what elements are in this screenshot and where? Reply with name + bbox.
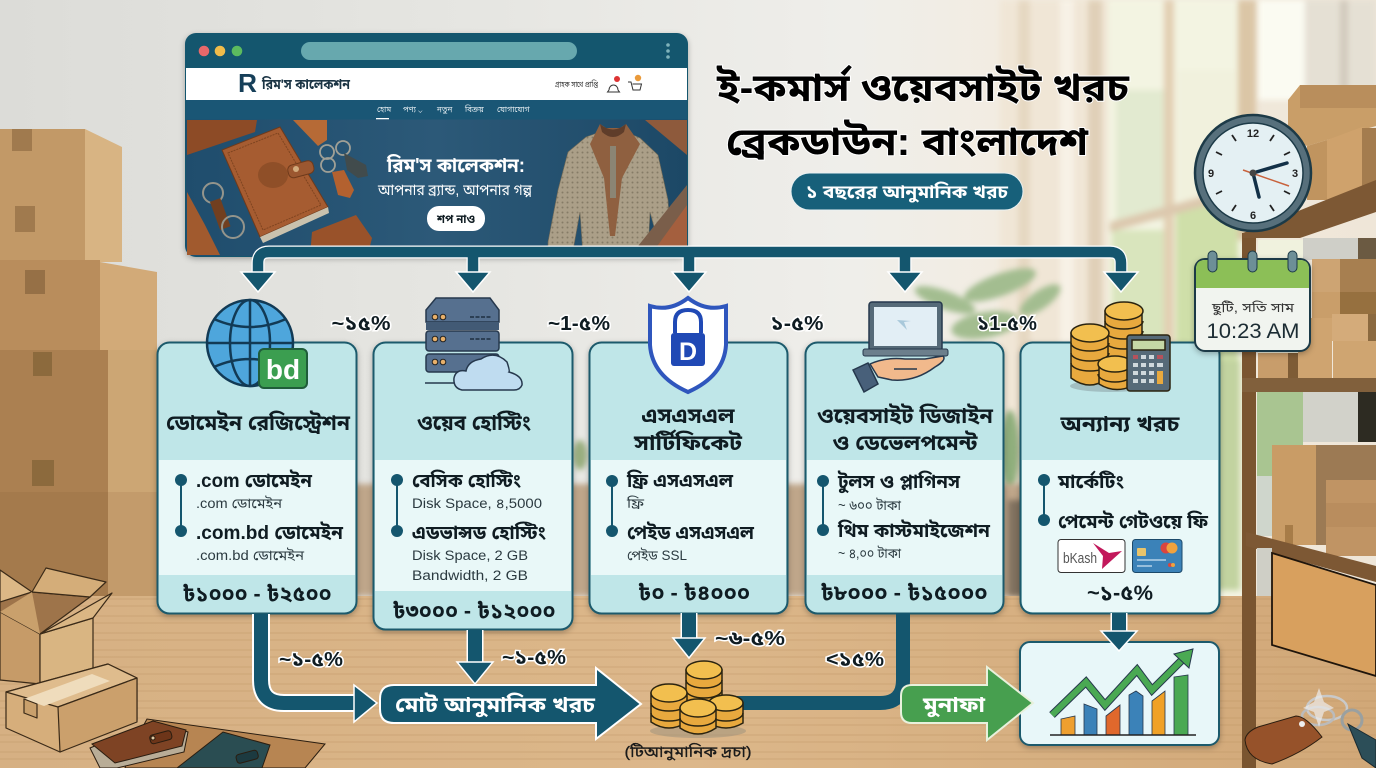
icon: coin stacks (650, 661, 746, 738)
icon: coins and calculator (1070, 302, 1170, 392)
boxes: left stack (0, 129, 157, 596)
icon: globe with bd badge: bd (266, 354, 300, 385)
panel: website design and development: ও ডেভেলপমেন্ট (832, 431, 978, 455)
panel: web hosting: Disk Space, ৪,5000 (412, 496, 542, 511)
boxes: front left (0, 568, 137, 752)
title (716, 64, 1130, 164)
blurred back table (150, 484, 1030, 596)
site nav (186, 100, 687, 120)
panel: web hosting: Disk Space, 2 GB (412, 548, 528, 563)
panel: website design and development: টুলস ও প্লাগিনস (837, 471, 961, 494)
percent labels: bottom flow: ~১-৫% (502, 647, 566, 669)
coin caption: (টিআনুমানিক দ্রচা) (624, 744, 752, 761)
timeline (175, 474, 187, 537)
window and curtains (1000, 0, 1376, 600)
table tray with wallets (90, 719, 325, 768)
icon: calendar with time: ছুটি, সতি সাম (1211, 300, 1295, 316)
percent labels: top row: ১1-৫% (977, 313, 1037, 335)
icon: bKash logo (1058, 540, 1125, 572)
hero text: রিম'স কালেকশন: (386, 153, 525, 177)
panel: web hosting: Bandwidth, 2 GB (412, 568, 528, 583)
panel: web hosting: ওয়েব হোস্টিং (417, 411, 532, 435)
icon: bKash logo: bKash (1063, 550, 1097, 567)
percent labels: top row: ১-৫% (770, 313, 824, 335)
site header: R (238, 68, 257, 98)
site nav: নতুন (436, 105, 452, 115)
panel: domain registration: .com.bd ডোমেইন (196, 547, 305, 563)
icon: shield with lock: D (679, 338, 697, 366)
panel: ssl certificate: ৳০ - ৳৪০০০ (638, 582, 750, 605)
bars (1061, 675, 1188, 735)
timeline (606, 475, 618, 537)
icon: wall clock: 3 (1292, 168, 1298, 180)
site nav: বিক্রয় (464, 105, 485, 114)
panel: other costs: ~১-৫% (1087, 582, 1153, 605)
connector: browser to five cost cards (241, 252, 1138, 292)
icon: globe with bd badge (207, 300, 307, 388)
keychain: bottom right (1245, 688, 1376, 768)
panel: other costs: পেমেন্ট গেটওয়ে ফি (1058, 511, 1208, 533)
panel: ssl certificate: পেইড এসএসএল (627, 522, 755, 544)
kurta (548, 120, 687, 256)
panel: ssl certificate: সার্টিফিকেট (633, 430, 742, 455)
percent labels: bottom flow: ~৬-৫% (715, 628, 785, 650)
wooden table (0, 596, 1376, 768)
panel: web hosting: বেসিক হোস্টিং (412, 469, 521, 492)
panel: domain registration: ডোমেইন রেজিস্ট্রেশন (166, 411, 351, 435)
arrow: total estimated cost: মোট আনুমানিক খরচ (395, 693, 595, 717)
arrow: hosting to total (457, 630, 493, 684)
panel: website design and development: ৳৮০০০ - ৳১৫০০০ (820, 582, 988, 605)
panel: ssl certificate: ফ্রি এসএসএল (626, 470, 734, 492)
icon: payment card (1132, 540, 1182, 572)
arrow: ssl to coins (673, 613, 705, 658)
title: ই-কমার্স ওয়েবসাইট খরচ (716, 64, 1130, 110)
subtitle pill: ১ বছরের আনুমানিক খরচ (806, 182, 1009, 203)
wallet: brown (90, 721, 188, 768)
arrow: profit: মুনাফা (922, 694, 986, 717)
panel: web hosting: ৳৩০০০ - ৳১২০০০ (392, 600, 556, 623)
title: ব্রেকডাউন: বাংলাদেশ (726, 119, 1089, 164)
wallet: teal (177, 732, 270, 768)
icon: calendar with time (1195, 251, 1310, 351)
percent labels: bottom flow: <১৫% (826, 649, 884, 671)
site header (186, 68, 687, 100)
percent labels: bottom flow (279, 628, 884, 671)
site header: রিম'স কালেকশন (261, 76, 350, 92)
panel: domain registration: .com.bd ডোমেইন (196, 522, 344, 544)
panel: website design and development: ~ ৬০০ টাকা (838, 497, 901, 513)
icon: wall clock (1195, 115, 1311, 231)
percent labels: bottom flow: ~১-৫% (279, 649, 343, 671)
panel: web hosting: এডভান্সড হোস্টিং (412, 521, 547, 544)
arrow: design to coins (735, 613, 903, 703)
icon: wall clock: 9 (1208, 168, 1214, 180)
timeline (817, 475, 829, 536)
panel: domain registration: ৳১০০০ - ৳২৫০০ (182, 583, 332, 606)
panel: ssl certificate (590, 298, 788, 614)
browser mockup (185, 33, 688, 257)
icon: calendar with time: 10:23 AM (1206, 320, 1300, 343)
big box: bottom right (1272, 553, 1376, 676)
hero button (427, 206, 485, 231)
browser controls (199, 42, 670, 60)
panel: website design and development (806, 302, 1004, 614)
panel: domain registration (158, 300, 356, 614)
panel: ssl certificate: ফ্রি (626, 495, 645, 511)
icon: server and cloud (425, 298, 522, 390)
plant (573, 262, 1065, 490)
hero button: শপ নাও (436, 212, 475, 226)
panel: ssl certificate: পেইড SSL (627, 547, 687, 563)
hero banner (186, 120, 687, 256)
arrow: domain to total (261, 614, 377, 722)
site nav: যোগাযোগ (497, 105, 530, 114)
icon: shield with lock (650, 298, 726, 392)
icon: wall clock: 6 (1250, 210, 1256, 222)
arrow: other costs to profit chart (1101, 613, 1137, 651)
percent labels: top row (332, 313, 1037, 335)
panel: web hosting (374, 298, 572, 630)
site header: গ্রাহক সাথে প্রাপ্তি (555, 80, 599, 89)
icon: laptop on hand (853, 302, 948, 392)
percent labels: top row: ~১৫% (332, 313, 391, 335)
icon: wall clock: 12 (1247, 128, 1259, 140)
panel: ssl certificate: এসএসএল (642, 405, 736, 428)
hero banner: আপনার ব্র্যান্ড, আপনার গল্প (377, 182, 533, 199)
percent labels: top row: ~1-৫% (548, 313, 610, 335)
leather goods (187, 120, 372, 256)
boxes and shelves: right (1242, 85, 1376, 768)
panel: other costs (1020, 302, 1220, 614)
site nav: হোম (377, 105, 391, 114)
panel: domain registration: .com ডোমেইন (196, 495, 283, 511)
panel: other costs: মার্কেটিং (1057, 470, 1125, 493)
panel: growth chart (1020, 642, 1219, 745)
panel: domain registration: .com ডোমেইন (196, 470, 313, 492)
timeline (391, 474, 403, 537)
panel: website design and development: ওয়েবসাইট ডিজাইন (817, 404, 994, 428)
panel: other costs: অন্যান্য খরচ (1059, 413, 1180, 436)
arrow: profit (901, 667, 1033, 740)
panel: website design and development: থিম কাস্টমাইজেশন (837, 520, 991, 542)
panel: website design and development: ~ ৪,০০ টাকা (838, 545, 901, 561)
timeline (1038, 474, 1050, 526)
subtitle pill (791, 173, 1023, 210)
site nav: পণ্য ⌄ (403, 105, 423, 114)
trend arrow (1052, 660, 1182, 715)
arrow: total estimated cost (380, 668, 641, 739)
